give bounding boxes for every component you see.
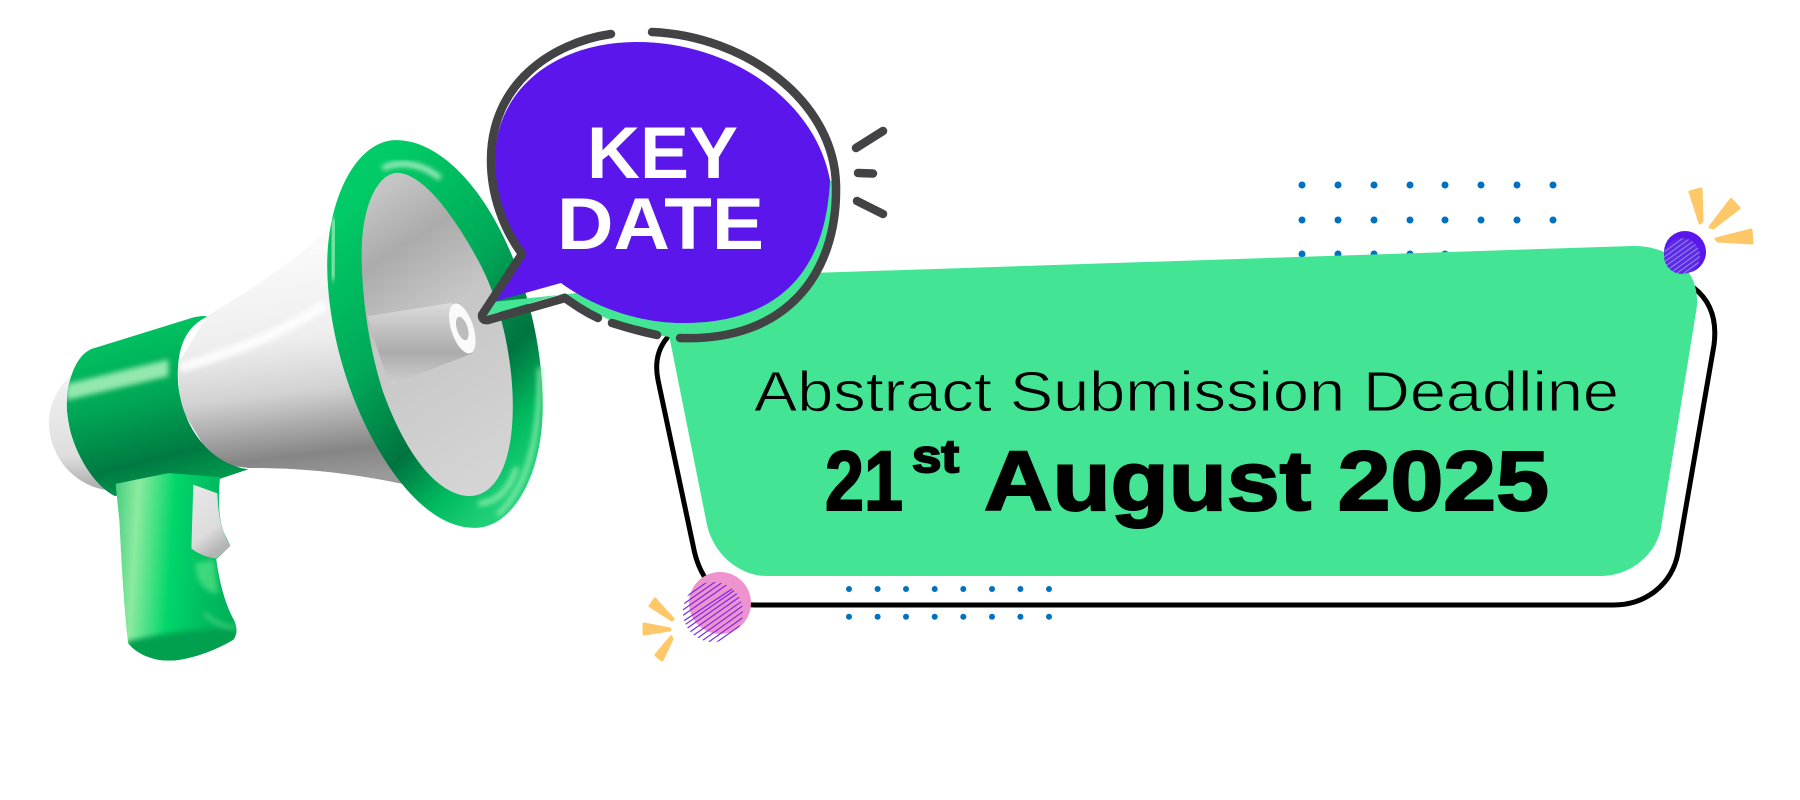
megaphone: handle	[116, 473, 236, 661]
megaphone: rim	[327, 140, 543, 528]
bubble: dashed outline	[482, 32, 836, 338]
icon: megaphone	[49, 140, 543, 666]
bubble label: DATE: DATE	[557, 184, 764, 265]
megaphone: tube ring	[444, 300, 481, 357]
megaphone: trigger	[191, 485, 230, 558]
megaphone: green body	[66, 316, 249, 496]
date: 21st August 2025: st	[912, 430, 959, 482]
dot grid: bottom	[846, 586, 1052, 620]
heading: abstract submission deadline: Abstract Submission Deadline	[754, 360, 1619, 424]
megaphone: inner tube	[367, 303, 473, 385]
icon: purple hatched circle	[1664, 231, 1706, 274]
icon: yellow burst bottom left	[644, 599, 673, 660]
panel: green date card	[669, 246, 1697, 576]
dot grid: top right	[1298, 182, 1556, 258]
bubble: green shadow fill	[486, 180, 836, 338]
megaphone: rim highlights	[332, 164, 540, 515]
black outline frame of the date panel	[657, 288, 1715, 605]
megaphone: inner bowl	[362, 173, 513, 496]
icon: sound lines	[856, 131, 883, 214]
date: 21st August 2025: 21	[825, 434, 903, 528]
speech bubble: key date	[482, 32, 836, 338]
megaphone: white back cap	[49, 374, 122, 491]
bubble: purple fill	[493, 42, 830, 323]
bubble label: KEY: KEY	[587, 113, 738, 194]
icon: pink hatched circle	[683, 572, 751, 642]
megaphone: cone	[178, 266, 402, 484]
icon: yellow burst top right	[1690, 189, 1752, 243]
megaphone: body highlight	[66, 359, 168, 400]
date: 21st August 2025: August 2025	[984, 434, 1549, 528]
date: 21st August 2025	[825, 430, 1549, 528]
